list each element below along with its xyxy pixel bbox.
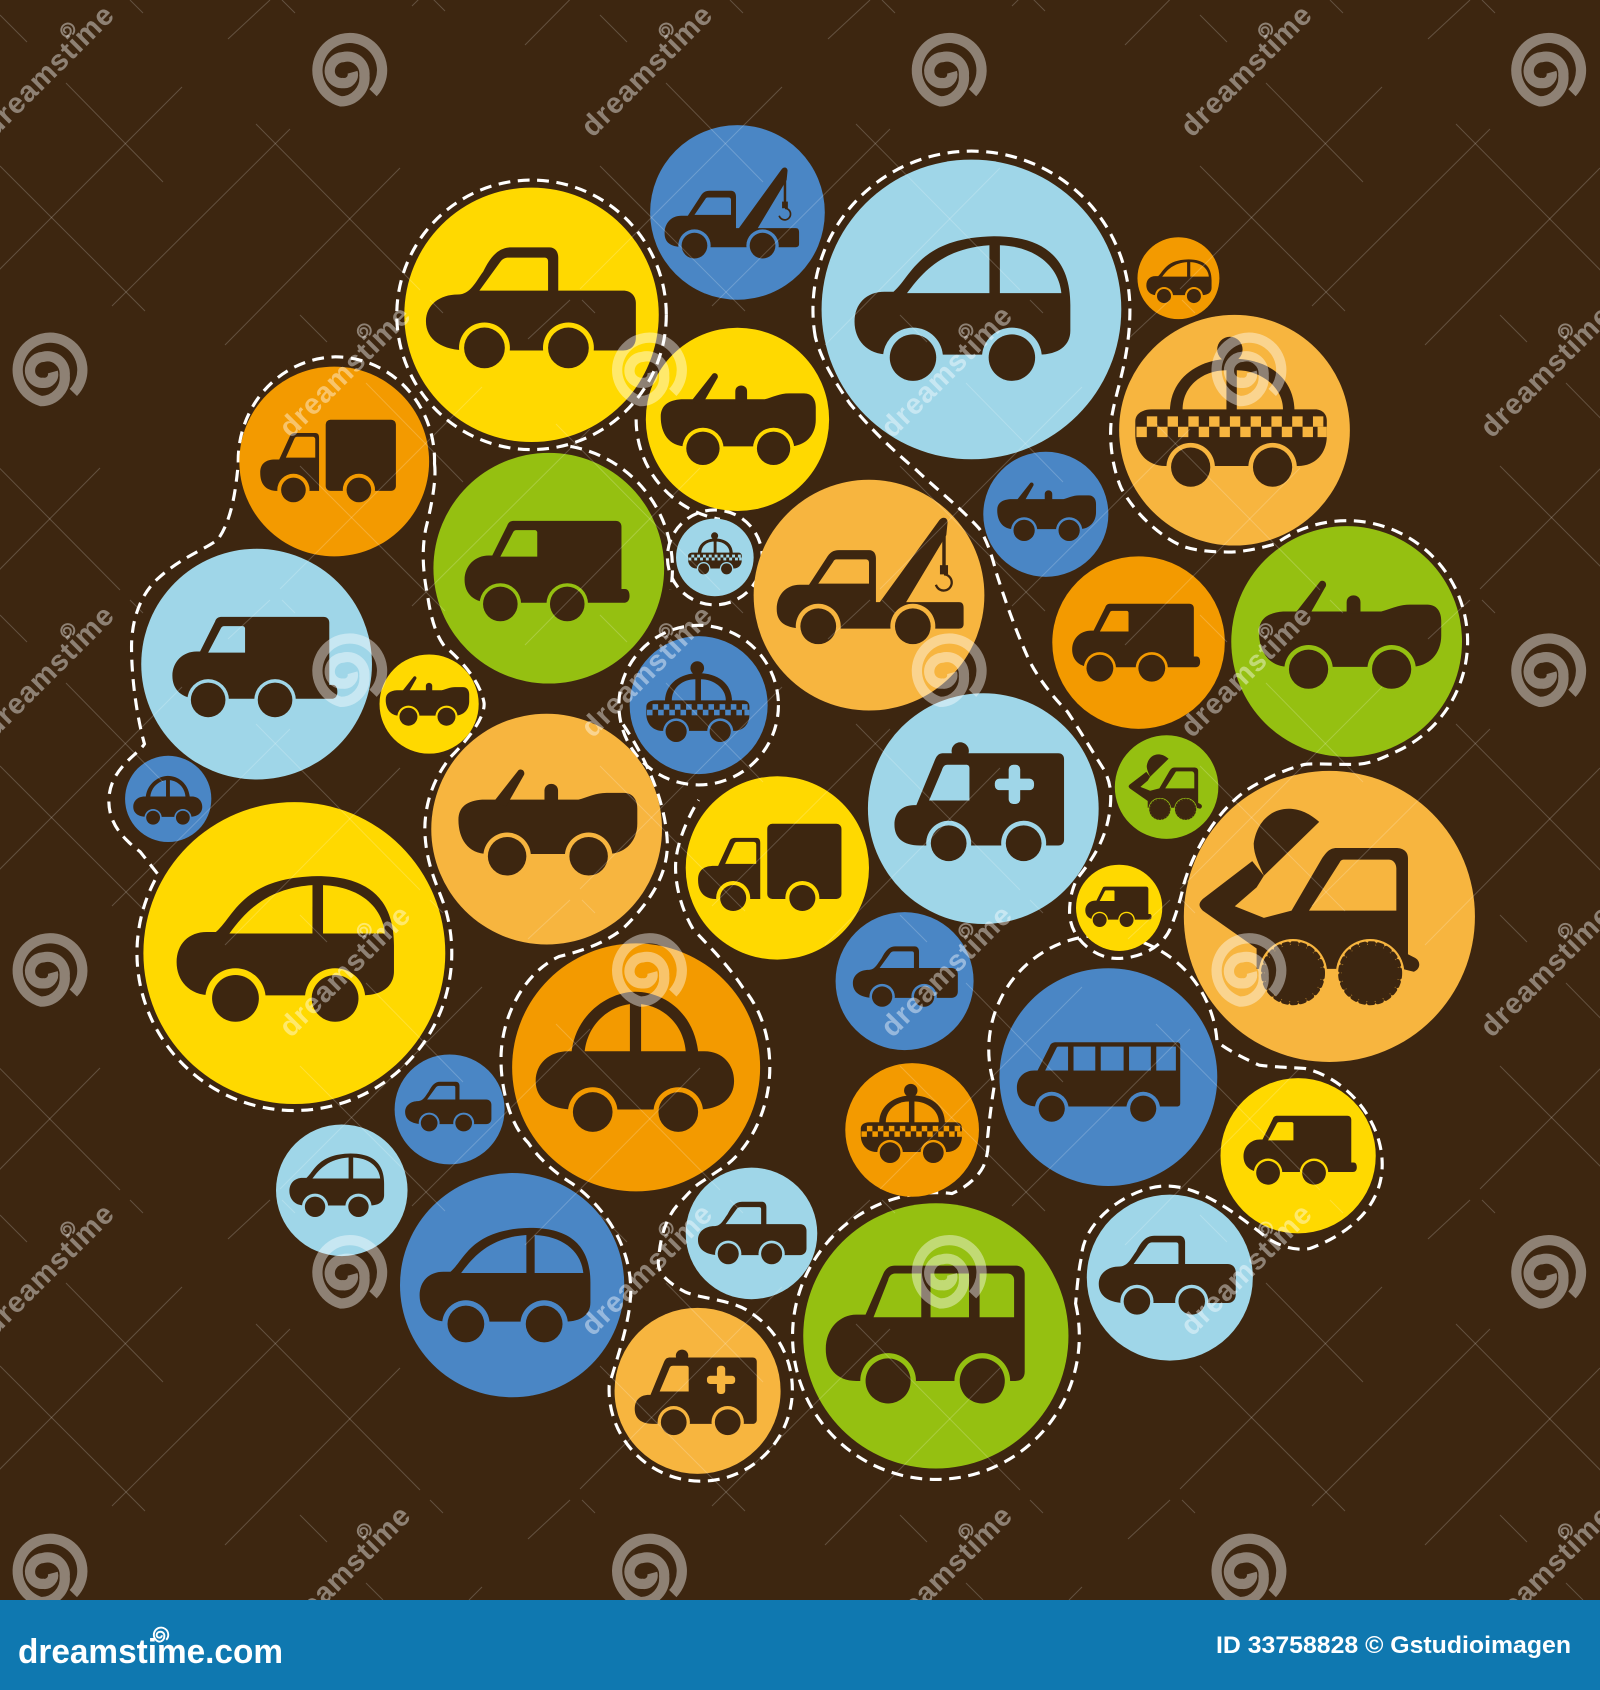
icon: yellow pickup bbox=[404, 188, 659, 442]
icon: yellow convertible bbox=[646, 328, 829, 511]
icon: yellow van bbox=[1220, 1078, 1376, 1233]
icon: light orange taxi bbox=[1119, 315, 1350, 546]
icon: orange beetle bbox=[512, 943, 760, 1191]
watermark text: dreamstime bbox=[875, 900, 1019, 1043]
icon: blue tow truck bbox=[650, 125, 825, 300]
icon: small light blue car bbox=[276, 1125, 408, 1256]
icon: tiny orange car bbox=[1137, 237, 1219, 319]
icon: green van bbox=[433, 453, 664, 684]
icon: small green digger bbox=[1115, 735, 1218, 839]
icon: green convertible bbox=[1231, 526, 1462, 757]
watermark text: dreamstime bbox=[575, 0, 719, 143]
icon: small blue pickup bbox=[395, 1054, 505, 1164]
dashed stitching outline bbox=[109, 151, 1468, 1481]
watermark text: dreamstime bbox=[575, 1198, 719, 1342]
footer logo text: dreamstime.com bbox=[18, 1633, 283, 1671]
watermark text: dreamstime bbox=[875, 300, 1019, 444]
icon: light orange ambulance bbox=[615, 1308, 781, 1474]
watermark text: dreamstime bbox=[273, 300, 417, 444]
icon: blue bus bbox=[999, 968, 1217, 1186]
icon: small yellow van bbox=[1076, 865, 1162, 951]
icon: orange truck bbox=[239, 367, 429, 556]
icon: orange taxi bbox=[845, 1063, 979, 1197]
watermark text: dreamstime bbox=[1175, 0, 1318, 143]
icon: light orange tow truck bbox=[754, 480, 984, 711]
icon: big yellow car bbox=[143, 802, 445, 1104]
icon: light blue car bbox=[822, 160, 1121, 459]
footer image id and credit: ID 33758828 © Gstudioimagen bbox=[1216, 1632, 1571, 1659]
icon: tiny blue beetle bbox=[125, 756, 211, 842]
icon: blue car bbox=[400, 1173, 624, 1397]
icon: light blue pickup bbox=[1087, 1195, 1253, 1361]
icon: mini light blue taxi bbox=[676, 519, 754, 596]
icon: light orange convertible bbox=[431, 714, 662, 944]
watermark text: dreamstime bbox=[273, 1500, 417, 1644]
icon: small yellow convertible bbox=[380, 654, 479, 754]
watermark text: dreamstime bbox=[575, 600, 719, 744]
icon: light blue van bbox=[141, 549, 372, 780]
icon: light orange digger bbox=[1184, 771, 1475, 1062]
icon: orange van bbox=[1052, 556, 1225, 729]
icon: light blue pickup small bbox=[686, 1168, 817, 1299]
icon: blue pickup bbox=[836, 912, 974, 1050]
watermark text: dreamstime bbox=[875, 1500, 1019, 1644]
watermark text: dreamstime bbox=[273, 900, 417, 1043]
footer logo spiral bbox=[154, 1628, 168, 1642]
footer bar bbox=[0, 1600, 1600, 1690]
watermark text: dreamstime bbox=[1175, 600, 1318, 744]
icon: blue convertible bbox=[983, 452, 1108, 577]
watermark text: dreamstime bbox=[1175, 1198, 1318, 1342]
icon: green minibus bbox=[803, 1203, 1068, 1468]
icon: yellow truck bbox=[686, 776, 869, 960]
icon: blue taxi bbox=[630, 636, 768, 774]
icon: light blue ambulance bbox=[868, 693, 1099, 924]
